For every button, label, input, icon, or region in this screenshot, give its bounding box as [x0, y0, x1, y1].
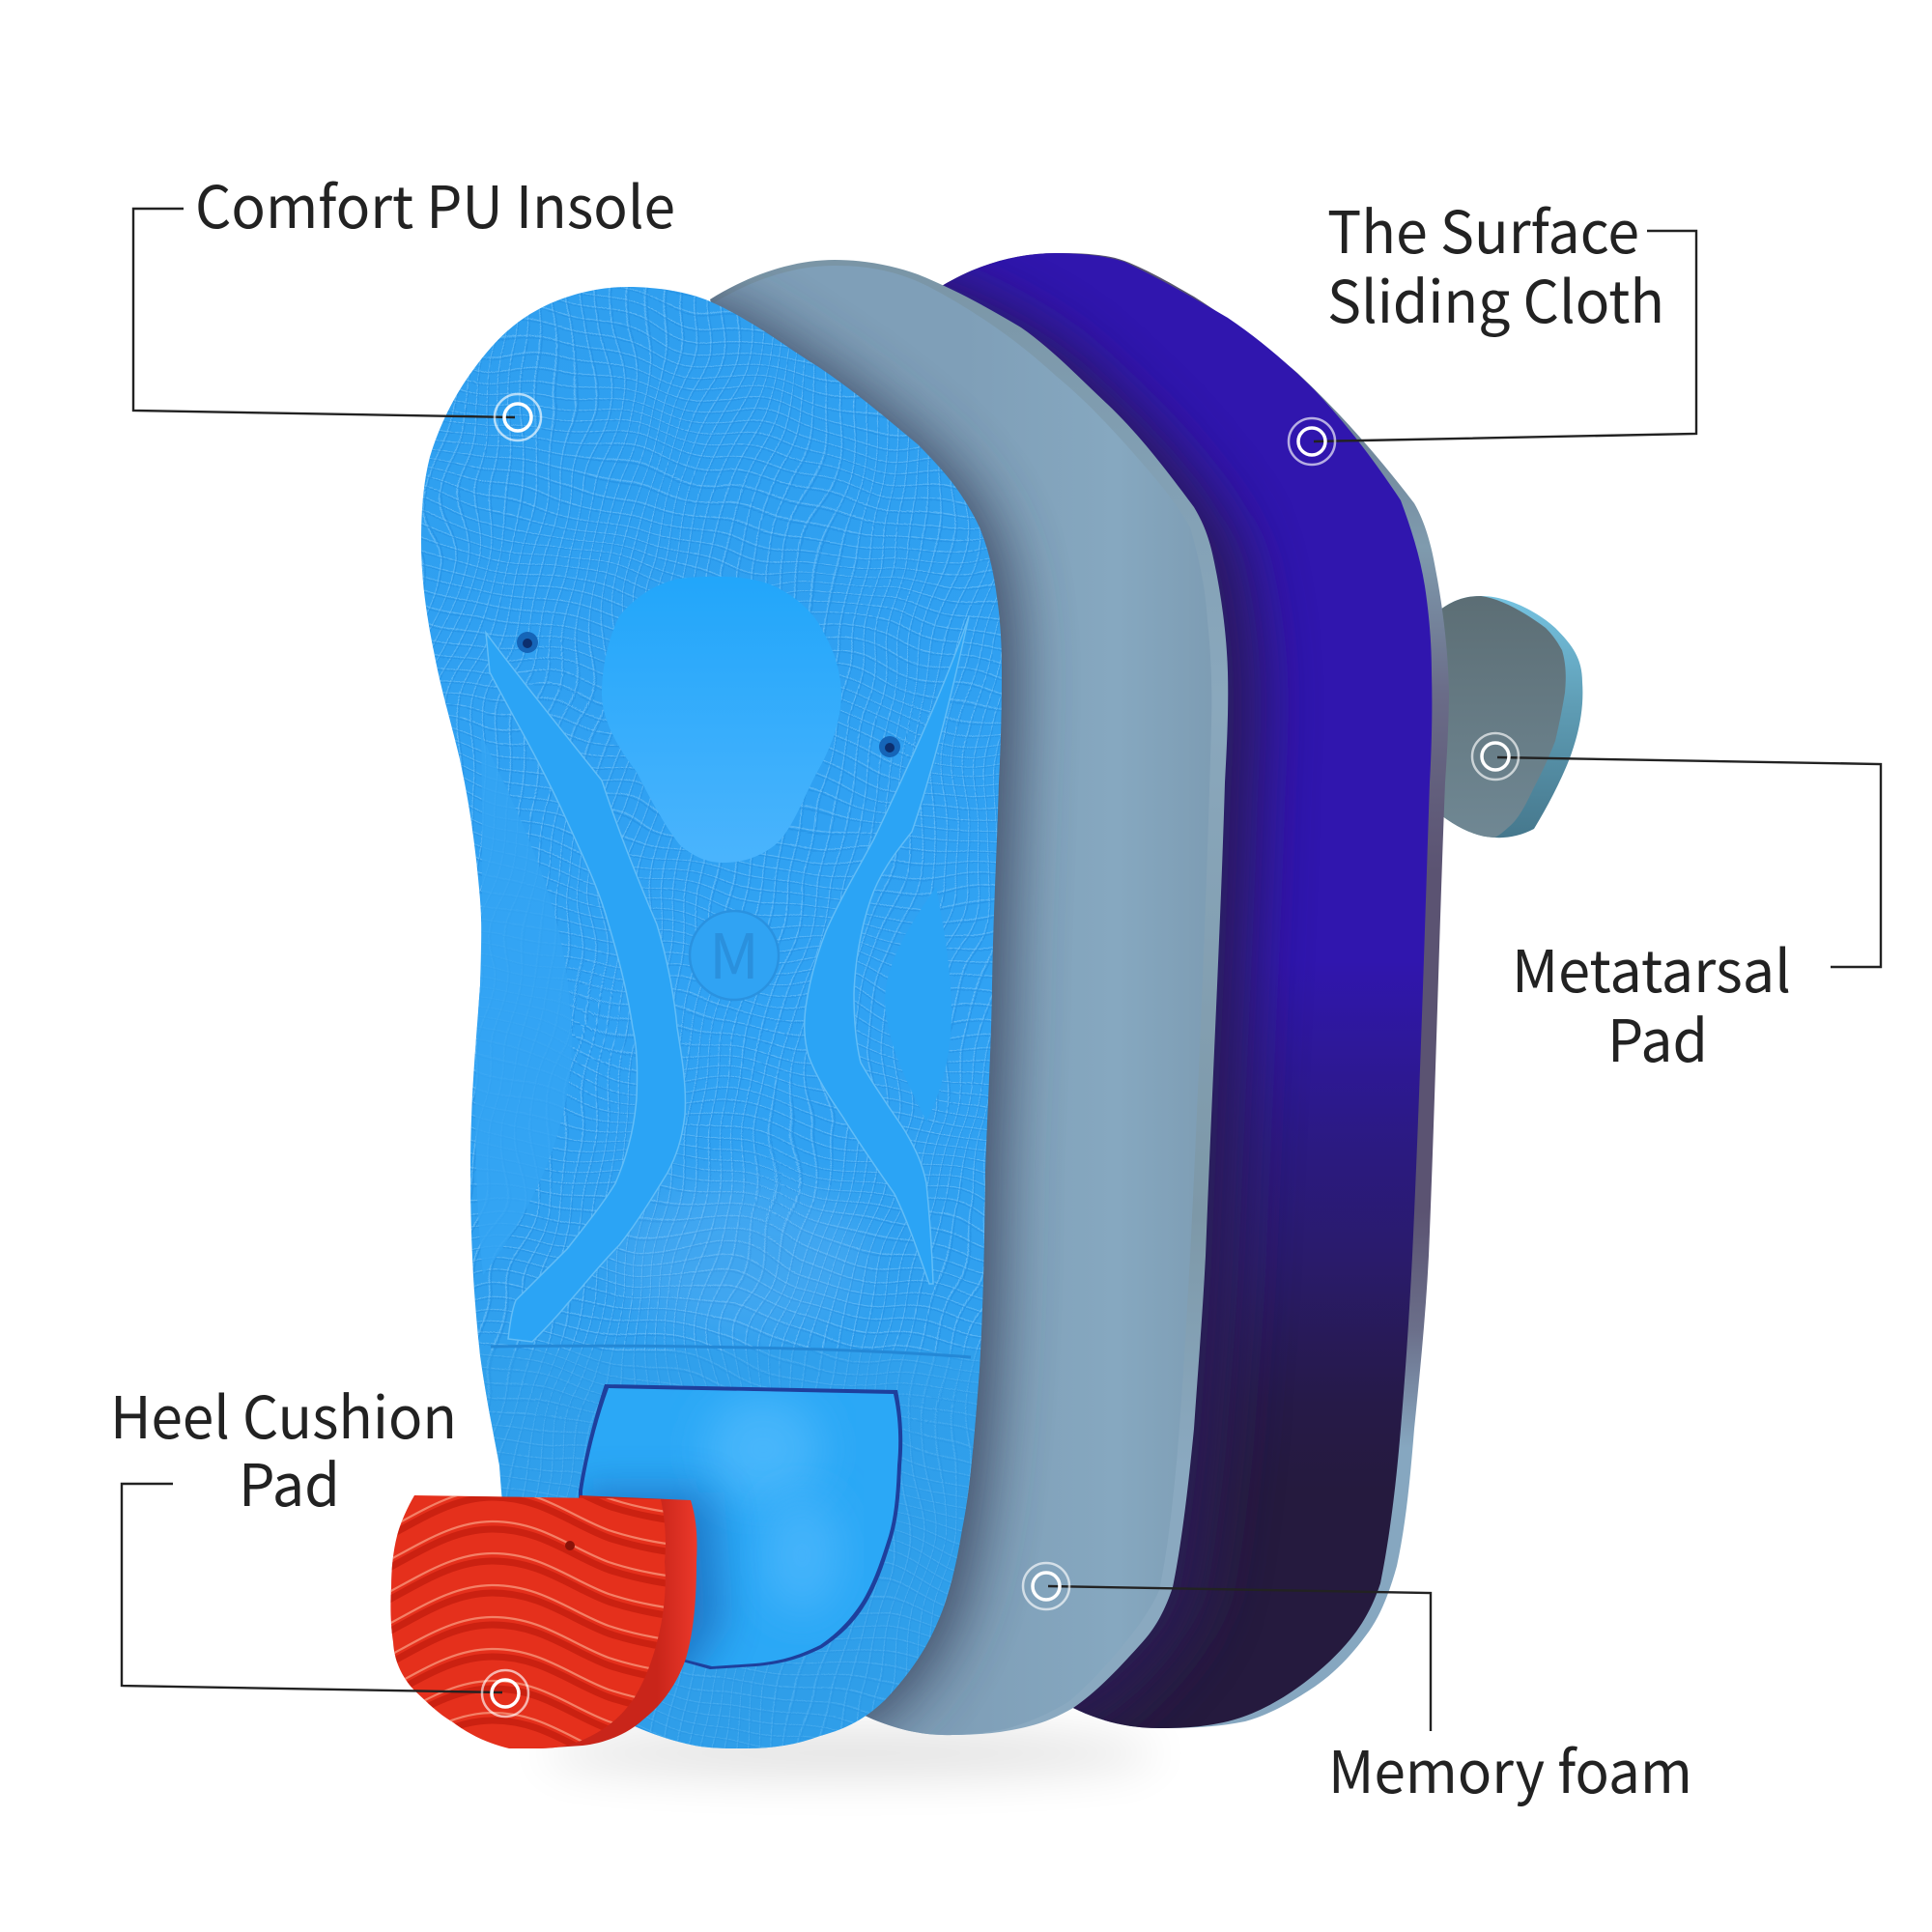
M badge [690, 908, 779, 1000]
left edge smooth zone [475, 734, 572, 1275]
metatarsal dome [602, 577, 841, 863]
callout: Memory foam: Memory foam [1328, 1726, 1692, 1810]
callout: Metatarsal Pad [1472, 733, 1881, 1079]
wave ridges [390, 1495, 666, 1745]
right arch band [805, 616, 969, 1284]
callout: Memory foam [1023, 1563, 1692, 1810]
callout: The Surface Sliding Cloth: The Surface [1327, 186, 1639, 270]
callout: Heel Cushion Pad: Heel Cushion [110, 1372, 457, 1456]
small hole [565, 1541, 575, 1550]
callout: Heel Cushion Pad [110, 1372, 528, 1717]
ground shadow [541, 1732, 1159, 1775]
callout: The Surface Sliding Cloth [1289, 186, 1696, 465]
callout: Metatarsal Pad: Metatarsal [1512, 925, 1791, 1009]
hole left [517, 632, 538, 653]
callout: Comfort PU Insole: Comfort PU Insole [195, 161, 675, 245]
callout: The Surface Sliding Cloth: Sliding Cloth [1327, 256, 1664, 340]
blue PU insole [421, 287, 1002, 1748]
heel seam [491, 1346, 971, 1357]
callout: Metatarsal Pad: Pad [1607, 995, 1708, 1079]
hole right [879, 736, 900, 757]
heel recess [579, 1384, 902, 1669]
surface sliding cloth: purple layer [943, 253, 1449, 1728]
mesh texture [421, 287, 1002, 1748]
smooth heel cup [464, 1350, 1005, 1756]
callout: Comfort PU Insole [133, 161, 675, 440]
red pad shadow [580, 1492, 720, 1700]
M badge: M [709, 908, 759, 997]
heel cushion pad [390, 1495, 697, 1748]
left arch band [486, 633, 685, 1342]
metatarsal pad [1430, 596, 1582, 838]
memory foam: gray layer [710, 260, 1229, 1735]
callout: Heel Cushion Pad: Pad [239, 1439, 340, 1523]
lower mesh highlight [618, 1179, 869, 1333]
right crescent [885, 887, 952, 1122]
infographic: exploded insole layers [116, 182, 1882, 1806]
